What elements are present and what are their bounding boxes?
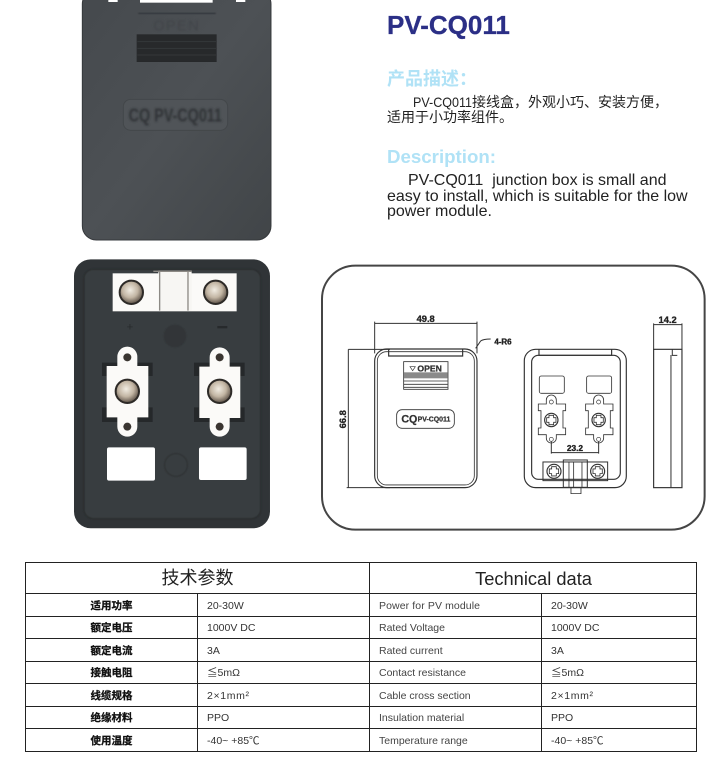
table heading: English: Technical data [475,568,593,589]
dimension lines: 66.8 [338,410,348,428]
column: English values: 3A [551,645,564,657]
column: Chinese labels: 额定电压 [90,621,133,634]
column: Chinese labels [90,599,133,747]
heading: Chinese description: 产品描述： [387,69,477,89]
polarity marks: + [127,322,134,334]
heading: English description: Description: [387,146,496,167]
photo: junction box cover [82,0,271,240]
column: Chinese values: ≦5mΩ [207,666,240,679]
column: Chinese values: 20-30W [207,600,244,612]
column: Chinese values: 1000V DC [207,622,256,634]
table heading: Chinese: 技术参数 [162,568,234,588]
front view: CQ [401,413,417,425]
column: English labels: Insulation material [379,712,464,724]
column: Chinese labels: 绝缘材料 [90,711,133,724]
dimension lines: 23.2 [567,443,583,453]
column: English values: 2×1mm² [551,690,594,702]
column: English values: PPO [551,712,573,724]
dimension lines: 4-R6 [494,338,512,347]
text block: Chinese description [387,94,668,125]
top busbar terminal [113,271,237,311]
column: English values: ≦5mΩ [551,666,584,679]
side view [654,349,682,488]
front view [375,349,477,488]
photo: junction box cover: OPEN [153,19,200,35]
panel: dimension drawing [322,266,705,530]
left terminal [102,347,153,437]
column: English values: -40~ +85℃ [551,735,604,747]
text block: English description [387,172,688,220]
text block: English description: easy to install, which is suitable for the low [387,188,688,205]
front view: PV-CQ011 [418,417,450,424]
column: English labels: Temperature range [379,735,468,747]
column: Chinese labels: 线缆规格 [90,689,133,702]
column: English labels: Rated current [379,645,443,657]
column: English values [551,600,604,747]
column: Chinese labels: 适用功率 [90,599,133,612]
column: English labels: Contact resistance [379,667,466,679]
dimension lines: 49.8 [417,314,435,324]
column: English values: 20-30W [551,600,588,612]
text block: English description: PV-CQ011 junction box is small and [408,172,666,189]
rear view [524,349,626,494]
text block: Chinese description: 接线盒，外观小巧、安装方便， [472,94,668,110]
column: Chinese values: PPO [207,712,229,724]
cable openings [107,447,247,481]
column: Chinese labels: 额定电流 [90,644,133,657]
column: Chinese values: -40~ +85℃ [207,735,260,747]
column: English labels: Rated Voltage [379,622,445,634]
right terminal [194,347,245,437]
text block: Chinese description: 适用于小功率组件。 [387,109,513,125]
column: English labels: Cable cross section [379,690,471,702]
photo: junction box interior [74,259,270,528]
column: Chinese labels: 使用温度 [90,734,133,747]
title: PV-CQ011 [387,10,510,40]
column: Chinese values [207,600,260,747]
column: Chinese values: 3A [207,645,220,657]
table: technical data [25,562,697,752]
front view: OPEN [417,363,442,373]
text block: Chinese description: PV-CQ011 [413,94,472,110]
column: English labels: Power for PV module [379,600,480,612]
dimension lines: 14.2 [659,315,677,325]
column: English labels [379,600,480,747]
text block: English description: power module. [387,203,492,220]
column: English values: 1000V DC [551,622,600,634]
column: Chinese values: 2×1mm² [207,690,250,702]
photo: junction box cover: CQ PV-CQ011 [129,105,222,126]
column: Chinese labels: 接触电阻 [90,666,133,679]
dimension lines [338,314,682,488]
